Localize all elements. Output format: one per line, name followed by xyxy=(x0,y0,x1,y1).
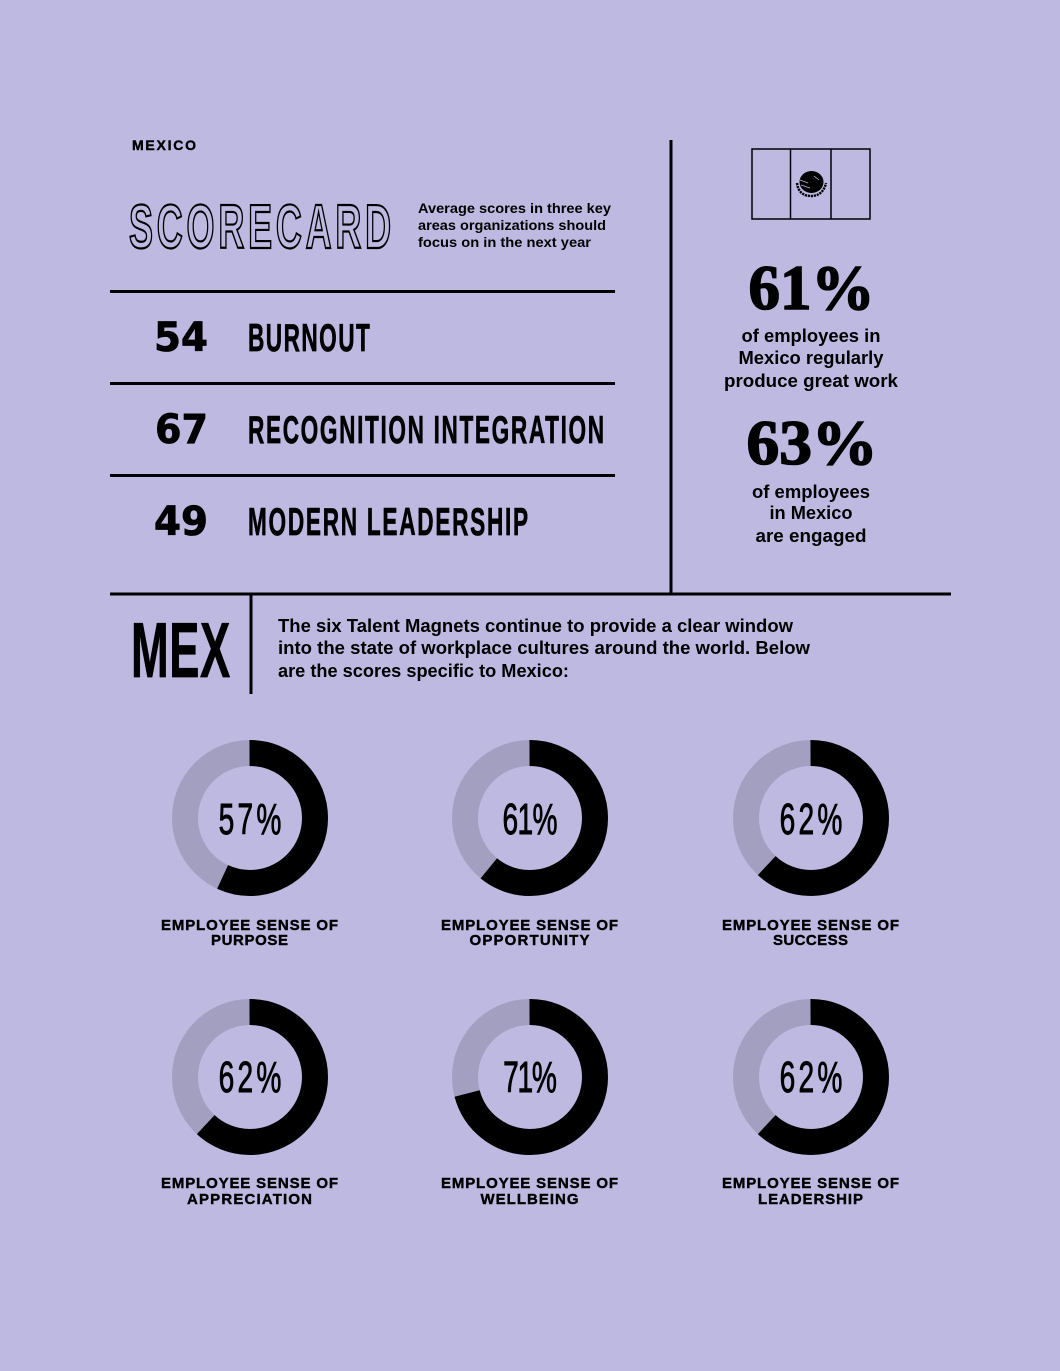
icon: Mexican flag xyxy=(752,149,870,219)
stat: 63% engaged: in Mexico xyxy=(770,503,852,523)
score row: burnout xyxy=(154,315,370,361)
stat: 61% produce great work: of employees in xyxy=(742,326,880,346)
donut: wellbeing 71% xyxy=(441,1012,618,1208)
score row: burnout: BURNOUT xyxy=(248,316,370,360)
intro paragraph: The six Talent Magnets continue to provide a clear window xyxy=(278,616,794,636)
donut: appreciation 62% xyxy=(161,1012,338,1208)
stat: 63% engaged: are engaged xyxy=(756,526,866,546)
stat: 61% produce great work: 61% xyxy=(748,253,874,323)
scorecard description: focus on in the next year xyxy=(418,234,592,250)
donut: purpose 57%: 57% xyxy=(219,795,281,844)
donut: purpose 57%: PURPOSE xyxy=(211,932,288,949)
donut: wellbeing 71%: 71% xyxy=(503,1053,557,1102)
donut: leadership 62% xyxy=(722,1012,899,1208)
donut: opportunity 61%: OPPORTUNITY xyxy=(470,932,590,949)
donut: appreciation 62%: 62% xyxy=(219,1053,281,1102)
score row: recognition integration: 67 xyxy=(155,407,208,453)
scorecard description xyxy=(418,200,611,250)
score row: burnout: 54 xyxy=(154,315,208,361)
donut: opportunity 61% xyxy=(441,753,618,949)
donut: opportunity 61%: EMPLOYEE SENSE OF xyxy=(441,917,618,934)
donut: success 62%: 62% xyxy=(780,795,842,844)
donut: wellbeing 71%: WELLBEING xyxy=(480,1191,578,1208)
donut: success 62%: SUCCESS xyxy=(773,932,848,949)
stat: 63% engaged: 63% xyxy=(746,408,878,478)
donut: success 62%: EMPLOYEE SENSE OF xyxy=(722,917,899,934)
donut: purpose 57% xyxy=(161,753,338,949)
stat: 61% produce great work: Mexico regularly xyxy=(738,348,884,368)
stat: 61% produce great work: produce great work xyxy=(724,371,899,391)
stat: 61% produce great work xyxy=(724,253,899,391)
donut: purpose 57%: EMPLOYEE SENSE OF xyxy=(161,917,338,934)
scorecard description: areas organizations should xyxy=(418,217,606,233)
donut: appreciation 62%: APPRECIATION xyxy=(187,1191,312,1208)
scorecard description: Average scores in three key xyxy=(418,200,611,216)
intro paragraph: into the state of workplace cultures around the world. Below xyxy=(278,638,811,658)
title: SCORECARD: SCORECARD xyxy=(129,192,391,261)
donut: success 62% xyxy=(722,753,899,949)
donut: leadership 62%: LEADERSHIP xyxy=(758,1191,863,1208)
donut: leadership 62%: 62% xyxy=(780,1053,842,1102)
country code: MEX: MEX xyxy=(131,606,230,694)
intro paragraph: are the scores specific to Mexico: xyxy=(278,661,569,681)
stat: 63% engaged xyxy=(746,408,878,546)
donut: leadership 62%: EMPLOYEE SENSE OF xyxy=(722,1175,899,1192)
donut: appreciation 62%: EMPLOYEE SENSE OF xyxy=(161,1175,338,1192)
score row: modern leadership: MODERN LEADERSHIP xyxy=(248,500,528,544)
donut: wellbeing 71%: EMPLOYEE SENSE OF xyxy=(441,1175,618,1192)
eyebrow: MEXICO: MEXICO xyxy=(132,137,196,153)
score row: recognition integration: RECOGNITION INTEGRATION xyxy=(248,408,604,452)
stat: 63% engaged: of employees xyxy=(752,482,870,502)
donut: opportunity 61%: 61% xyxy=(502,795,558,844)
intro paragraph xyxy=(278,616,811,681)
score row: modern leadership: 49 xyxy=(154,499,208,545)
